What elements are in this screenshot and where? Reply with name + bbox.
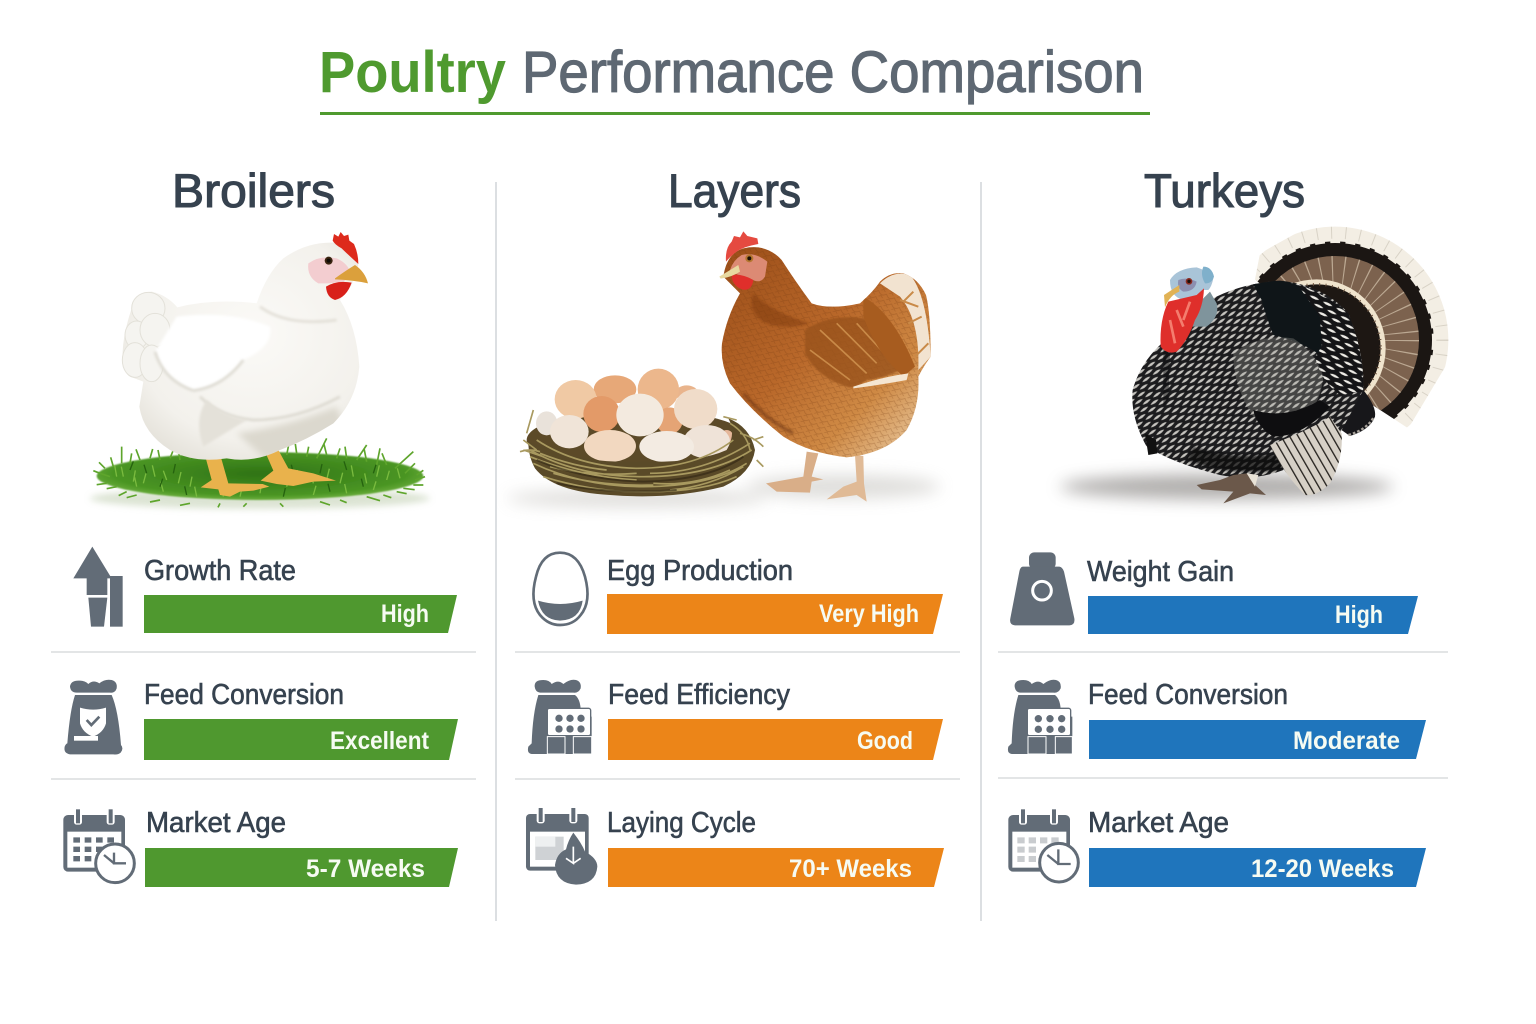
metric: egg production	[533, 553, 943, 634]
metric: weight gain	[1010, 552, 1418, 634]
label: Market Age	[1088, 807, 1229, 839]
bar: Good	[608, 719, 943, 760]
bar: High	[1088, 596, 1418, 634]
title: Poultry	[319, 40, 506, 105]
metric: feed efficiency	[528, 679, 943, 760]
label: Feed Conversion	[144, 679, 344, 711]
label: Laying Cycle	[607, 807, 756, 839]
metric: growth rate	[73, 547, 457, 633]
bar: Excellent	[144, 719, 458, 760]
bar: Good: Good	[857, 727, 913, 755]
bar: High: High	[1335, 601, 1383, 629]
icon: feed bag	[64, 680, 122, 754]
icon: calendar with hen	[526, 808, 597, 885]
icon: feed bag with egg tray	[528, 680, 592, 754]
icon: calendar with clock	[1008, 809, 1078, 882]
bar: Moderate: Moderate	[1293, 727, 1400, 755]
bar: Moderate	[1089, 720, 1426, 759]
title: Performance Comparison	[522, 40, 1144, 105]
bar: High: High	[381, 600, 429, 628]
metric: market age	[63, 807, 458, 887]
metric: laying cycle	[526, 807, 944, 887]
label: Feed Conversion	[1088, 679, 1288, 711]
tail fluff	[122, 292, 170, 382]
icon: egg	[533, 553, 588, 625]
image: turkey with fanned tail	[1060, 227, 1448, 503]
bar: Excellent: Excellent	[330, 727, 430, 755]
heading: Layers: Layers	[668, 164, 801, 217]
bar: Very High	[607, 594, 943, 634]
icon: calendar with clock	[63, 809, 134, 883]
image: brown hen with eggs in nest	[507, 231, 940, 507]
bar: 70+ Weeks: 70+ Weeks	[789, 855, 912, 883]
label: Weight Gain	[1087, 556, 1234, 588]
bar: 12-20 Weeks	[1089, 848, 1426, 887]
panel: turkeys	[998, 164, 1448, 887]
panel: broilers	[51, 164, 476, 887]
bar: 12-20 Weeks: 12-20 Weeks	[1251, 855, 1394, 883]
heading: Turkeys: Turkeys	[1144, 164, 1305, 217]
metric: market age	[1008, 807, 1426, 887]
bar: 5-7 Weeks: 5-7 Weeks	[306, 855, 425, 883]
image: white broiler chicken on grass	[90, 232, 430, 509]
icon: feed bag with egg tray	[1008, 680, 1072, 754]
bar: Very High: Very High	[819, 600, 919, 628]
metric: feed conversion	[1008, 679, 1426, 759]
bar: 70+ Weeks	[608, 848, 944, 887]
panel: layers	[507, 164, 960, 887]
label: Feed Efficiency	[608, 679, 790, 711]
icon: weight	[1010, 552, 1074, 625]
icon: growth arrow	[73, 547, 123, 627]
label: Market Age	[146, 807, 286, 839]
bar: High	[144, 595, 457, 633]
label: Growth Rate	[144, 555, 296, 587]
heading: Broilers: Broilers	[172, 164, 335, 217]
bar: 5-7 Weeks	[145, 848, 458, 887]
metric: feed conversion	[64, 679, 458, 760]
label: Egg Production	[607, 555, 793, 587]
